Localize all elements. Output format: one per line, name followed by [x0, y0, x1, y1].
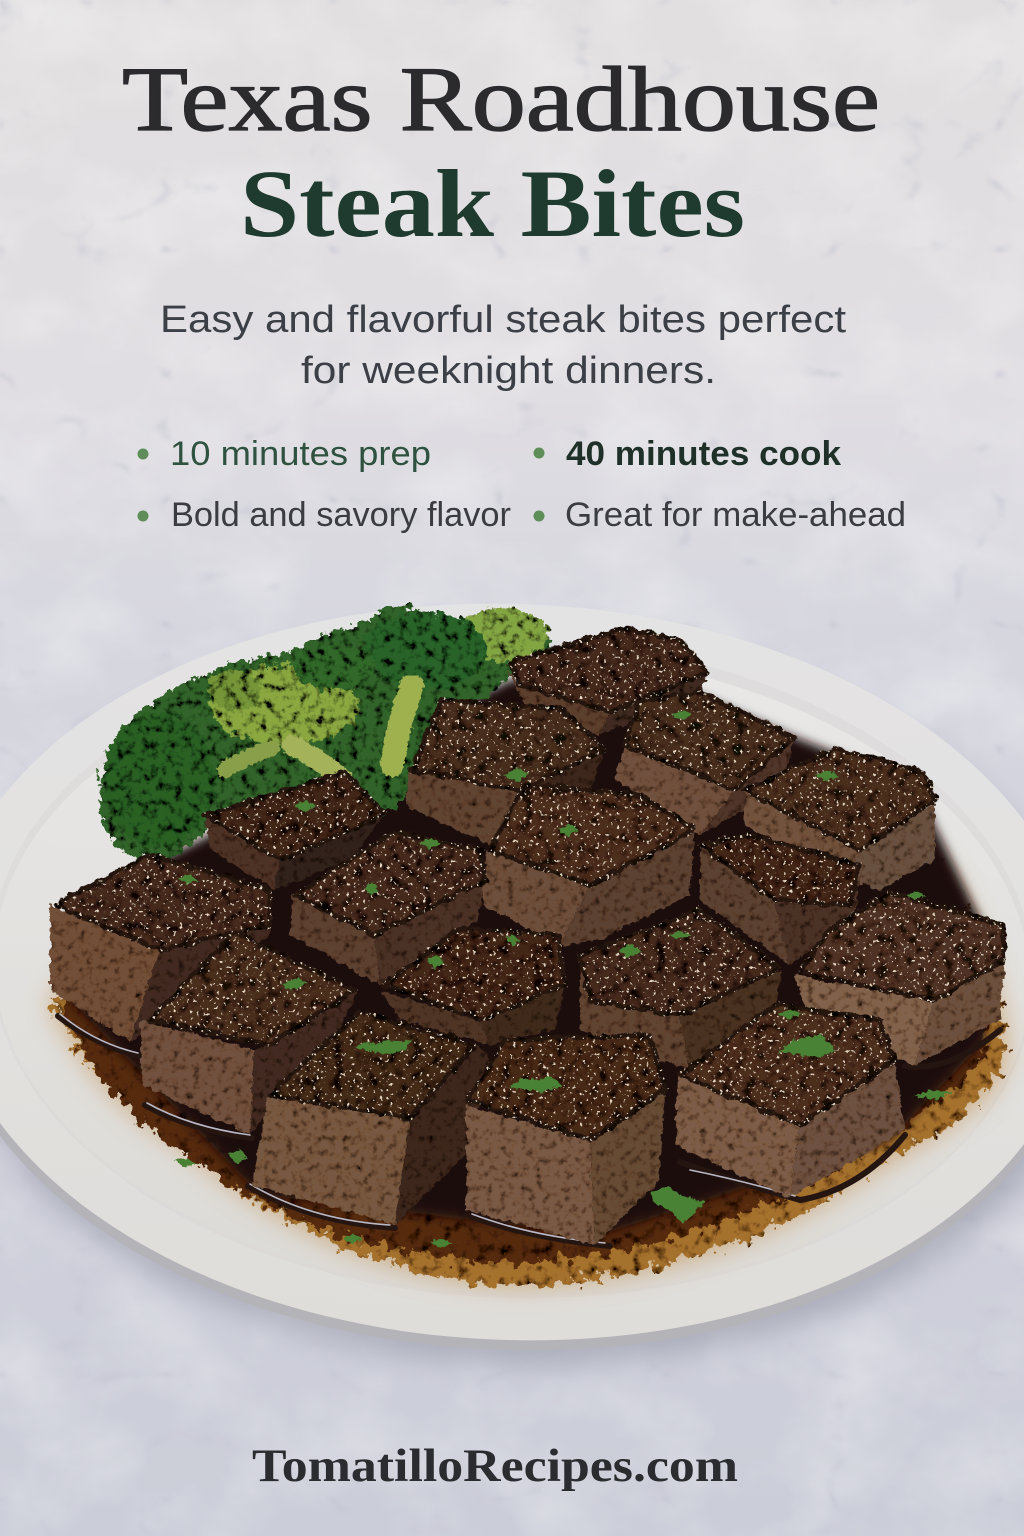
steak bite: centre left — [290, 832, 485, 985]
bullet: great for make-ahead: Great for make-ahead — [565, 496, 906, 534]
steak bite: mid right — [580, 910, 782, 1070]
steak bite: upper middle left — [405, 700, 605, 845]
oil shine lines — [58, 1014, 1000, 1246]
footer website: TomatilloRecipes.com — [252, 1440, 738, 1492]
steak bite: mid centre — [380, 928, 565, 1045]
steak bite: centre right — [700, 835, 860, 965]
broccoli florets: deep green tops — [104, 612, 487, 846]
steak bite: far right lower — [795, 892, 1005, 1065]
steak bites — [50, 628, 1005, 1245]
bullet: bold and savory flavor: Bold and savory flavor — [171, 496, 511, 534]
subtitle: Easy and flavorful steak bites perfect — [160, 299, 846, 341]
steak bite: front centre — [466, 1035, 665, 1245]
broccoli florets: base mass — [100, 606, 553, 862]
steak bite: far left — [50, 855, 272, 1042]
steak bite: far right upper — [745, 748, 935, 890]
broccoli stems — [225, 685, 412, 778]
steak bite: upper middle right — [615, 692, 795, 835]
shadow under the steak cluster — [70, 660, 985, 1235]
bullet: 40 minutes cook: 40 minutes cook — [566, 435, 841, 473]
broccoli — [100, 606, 553, 862]
herb garnish — [174, 710, 952, 1248]
plate — [0, 584, 1024, 1384]
steak bite: left upper — [205, 772, 385, 890]
title line one: Texas Roadhouse — [122, 48, 880, 150]
steak bite: front left — [252, 1012, 490, 1225]
title line two: Steak Bites — [240, 150, 745, 257]
subtitle: for weeknight dinners. — [301, 350, 716, 392]
broccoli florets: yellow-green tops — [207, 608, 548, 745]
feature list — [138, 435, 906, 534]
bullet: 10 minutes prep: 10 minutes prep — [170, 435, 431, 473]
steak bite: lower left — [140, 932, 358, 1135]
sauce pool — [50, 660, 1005, 1286]
steak bite: lower right — [675, 1005, 905, 1198]
subtitle — [160, 299, 846, 392]
steak bite: centre large — [482, 785, 695, 945]
steak bite: back centre — [505, 628, 708, 735]
